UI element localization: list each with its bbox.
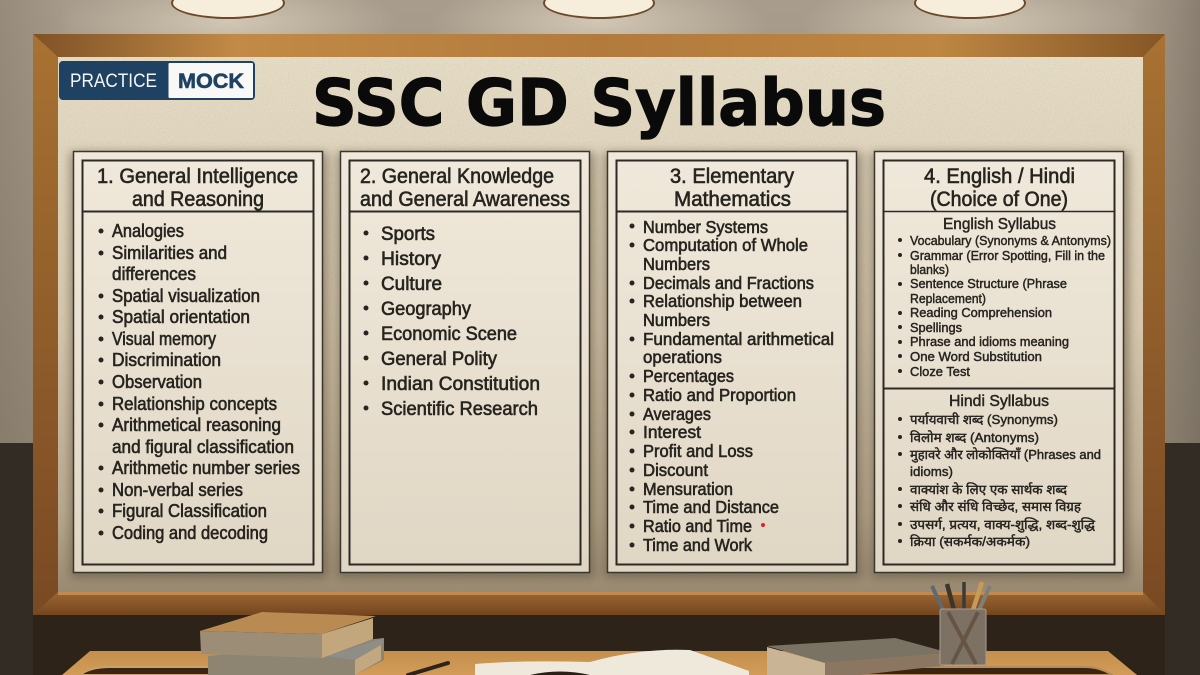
panel 2 list bbox=[364, 224, 540, 420]
Hindi syllabus: पर्यायवाची शब्द (Synonyms) bbox=[910, 412, 1058, 427]
panel 3 list: Computation of Whole bbox=[643, 235, 808, 255]
panel 3: Elementary Mathematics bbox=[608, 152, 856, 572]
panel 1 heading: and Reasoning bbox=[132, 188, 264, 211]
Hindi syllabus: मुहावरे और लोकोक्तियाँ (Phrases and bbox=[910, 447, 1101, 463]
panel 3 list: Profit and Loss bbox=[643, 441, 753, 461]
Hindi syllabus: संधि और संधि विच्छेद, समास विग्रह bbox=[910, 499, 1082, 514]
open book bbox=[475, 650, 749, 675]
panel 1 list: Discrimination bbox=[112, 350, 221, 370]
panel 4 heading: 4. English / Hindi bbox=[924, 165, 1075, 188]
panel 3 list: Ratio and Proportion bbox=[643, 385, 796, 405]
ceiling lamps bbox=[171, 0, 1026, 19]
panel 3 list: Time and Work bbox=[643, 535, 752, 555]
panel 3 list: Averages bbox=[643, 404, 711, 424]
panel 1 list: Visual memory bbox=[112, 329, 216, 349]
panel 4 heading: (Choice of One) bbox=[930, 188, 1068, 211]
Hindi syllabus bbox=[898, 393, 1101, 549]
panel 3 list: Time and Distance bbox=[643, 497, 779, 517]
Hindi syllabus: विलोम शब्द (Antonyms) bbox=[910, 430, 1039, 445]
English syllabus: One Word Substitution bbox=[910, 349, 1042, 364]
panel 2 list: Indian Constitution bbox=[381, 374, 540, 395]
panel 2 heading: 2. General Knowledge bbox=[360, 165, 554, 188]
pen on desk bbox=[408, 663, 448, 675]
panel 2 heading bbox=[360, 165, 570, 211]
panel 2 heading: and General Awareness bbox=[360, 188, 570, 211]
panel 3 list: Ratio and Time bbox=[643, 516, 752, 536]
panel 2 list: Sports bbox=[381, 224, 435, 245]
logo: Practice Mock: MOCK bbox=[178, 70, 244, 93]
panel 3 heading: 3. Elementary bbox=[670, 165, 794, 188]
logo: Practice Mock bbox=[59, 61, 255, 100]
panel 1 list: Relationship concepts bbox=[112, 394, 277, 414]
Hindi syllabus: वाक्यांश के लिए एक सार्थक शब्द bbox=[910, 482, 1068, 497]
English syllabus: Grammar (Error Spotting, Fill in the bbox=[910, 248, 1105, 263]
English syllabus: blanks) bbox=[910, 262, 949, 277]
English syllabus: Sentence Structure (Phrase bbox=[910, 276, 1067, 291]
English syllabus: Spellings bbox=[910, 320, 962, 335]
panel 1 list: Observation bbox=[112, 372, 202, 392]
panel 1 list: Analogies bbox=[112, 221, 184, 241]
panel 2 list: Culture bbox=[381, 274, 442, 295]
panel 3 list: Interest bbox=[643, 422, 701, 442]
panel 3 list: Numbers bbox=[643, 254, 710, 274]
English syllabus: English Syllabus bbox=[943, 216, 1056, 233]
desk bbox=[62, 651, 1137, 675]
panel 3 list: operations bbox=[643, 347, 722, 367]
pencil holder bbox=[932, 582, 990, 665]
panel 1 list: Figural Classification bbox=[112, 501, 267, 521]
panel 3 list: Numbers bbox=[643, 310, 710, 330]
English syllabus: Replacement) bbox=[910, 291, 986, 306]
panel 3 list: Decimals and Fractions bbox=[643, 273, 814, 293]
panel 4: English / Hindi bbox=[874, 152, 1124, 572]
logo: Practice Mock: PRACTICE bbox=[70, 71, 157, 92]
panel 1 list: Similarities and bbox=[112, 243, 227, 263]
panel 1 heading: 1. General Intelligence bbox=[97, 165, 298, 188]
panel 1 heading bbox=[97, 165, 298, 211]
panel 1 list: Arithmetical reasoning bbox=[112, 415, 281, 435]
Hindi syllabus: उपसर्ग, प्रत्यय, वाक्य-शुद्धि, शब्द-शुद्धि bbox=[910, 517, 1096, 533]
panel shadows bbox=[70, 152, 1129, 578]
panel 1 list: Coding and decoding bbox=[112, 523, 268, 543]
English syllabus: Vocabulary (Synonyms & Antonyms) bbox=[910, 233, 1111, 248]
panel 1 list: differences bbox=[112, 264, 196, 284]
panel 1 list: and figural classification bbox=[112, 437, 294, 457]
panel 2 list: Scientific Research bbox=[381, 399, 538, 420]
panel 3 list: Discount bbox=[643, 460, 708, 480]
Hindi syllabus: idioms) bbox=[910, 464, 953, 479]
panel 3 list bbox=[630, 217, 834, 555]
panel 3 list: Mensuration bbox=[643, 479, 733, 499]
panel 1 list bbox=[98, 221, 300, 543]
English syllabus bbox=[898, 216, 1111, 379]
panel 4 heading bbox=[924, 165, 1075, 211]
panel 1 list: Spatial visualization bbox=[112, 286, 260, 306]
panel 1: General Intelligence and Reasoning bbox=[74, 152, 322, 572]
panel 2: General Knowledge and General Awareness bbox=[340, 152, 590, 572]
Hindi syllabus: Hindi Syllabus bbox=[949, 393, 1049, 410]
panel 2 list: History bbox=[381, 249, 441, 270]
panel 3 list: Number Systems bbox=[643, 217, 768, 237]
panel 3 list: Fundamental arithmetical bbox=[643, 329, 834, 349]
panel 1 list: Arithmetic number series bbox=[112, 458, 300, 478]
panel 3 heading: Mathematics bbox=[674, 188, 791, 211]
closed book bbox=[767, 638, 950, 675]
panel 2 list: General Polity bbox=[381, 349, 497, 370]
panel 3 list: Percentages bbox=[643, 366, 734, 386]
panel 3 list: Relationship between bbox=[643, 291, 802, 311]
panel 2 list: Economic Scene bbox=[381, 324, 517, 345]
English syllabus: Cloze Test bbox=[910, 364, 970, 379]
stacked books bbox=[200, 612, 384, 675]
English syllabus: Reading Comprehension bbox=[910, 305, 1052, 320]
panel 1 list: Non-verbal series bbox=[112, 480, 243, 500]
panel 2 list: Geography bbox=[381, 299, 471, 320]
panel 1 list: Spatial orientation bbox=[112, 307, 250, 327]
title: SSC GD Syllabus bbox=[312, 67, 886, 141]
English syllabus: Phrase and idioms meaning bbox=[910, 334, 1069, 349]
Hindi syllabus: क्रिया (सकर्मक/अकर्मक) bbox=[910, 534, 1030, 549]
panel 3 heading bbox=[670, 165, 794, 211]
